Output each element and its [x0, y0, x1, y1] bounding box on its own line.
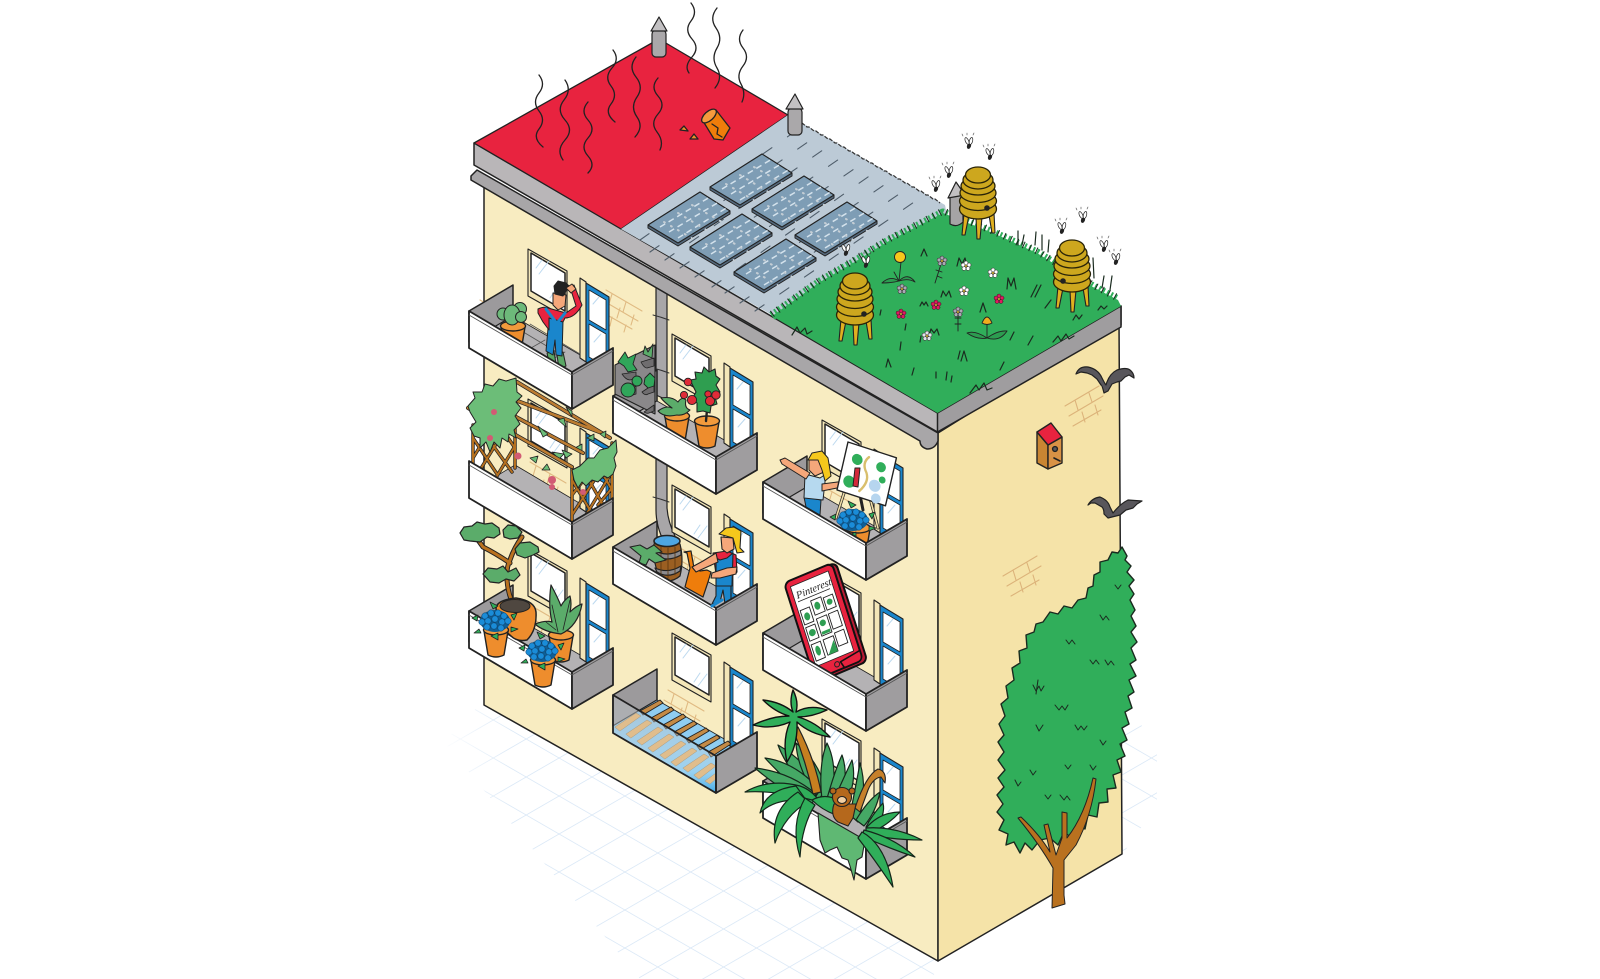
roof zigzag edge [788, 115, 940, 203]
left trellis [473, 400, 515, 476]
balcony column 2 row 1: living wall and tomato [613, 334, 757, 494]
bat lower [1088, 497, 1142, 518]
gravel dashes [640, 128, 920, 311]
beam leaves [538, 407, 606, 441]
rain barrel [653, 536, 682, 581]
leafy plant [630, 545, 666, 565]
woman [780, 451, 857, 515]
scattered wall leaves [530, 444, 582, 470]
tree [997, 547, 1137, 908]
grass tufts [792, 231, 1112, 393]
bat upper [1076, 367, 1134, 393]
beehive top [960, 167, 996, 239]
balcony column 1 row 3: bonsai and pots [460, 522, 613, 709]
building right wall [938, 320, 1122, 961]
jungle leaves mid [745, 783, 841, 857]
glass front [613, 695, 716, 793]
green roof meadow [772, 213, 1121, 413]
jungle leaves front [858, 803, 922, 887]
wooden slats front [615, 713, 716, 784]
balcony column 3 row 3: jungle planter [745, 690, 922, 887]
paintbrush hand [853, 468, 860, 487]
balcony column 3 row 2: giant phone with Pinterest [763, 561, 907, 731]
chimney by solar panels [786, 94, 803, 135]
chimney by beehive [948, 182, 965, 226]
tomato plant [680, 367, 720, 448]
heat waves [536, 3, 746, 173]
brick textures [474, 290, 1103, 732]
meadow flowers [882, 252, 1007, 339]
bonsai tree [460, 522, 539, 640]
right vine foliage [572, 440, 617, 488]
living wall [615, 344, 655, 414]
watering can [684, 551, 711, 597]
ground grid [440, 700, 1157, 979]
downpipe [653, 285, 675, 542]
balcony column 3 row 1: woman painting [763, 420, 907, 580]
easel legs [836, 490, 878, 528]
floor tiles [520, 324, 580, 360]
Pinterest label: Pinterest [794, 576, 834, 602]
balcony column 2 row 2: rain barrel and gardener [613, 485, 757, 645]
hive entrances [861, 205, 1066, 317]
chimney left [651, 17, 667, 57]
building left wall [484, 180, 938, 961]
grey gravel roof section [621, 115, 950, 315]
gardener [692, 527, 744, 604]
grass blades along roof edge [772, 211, 1118, 316]
red roof section [474, 39, 788, 229]
small potted plant [658, 398, 690, 443]
flower pot [830, 501, 876, 555]
solar panels [648, 154, 877, 293]
birdhouse [1037, 423, 1062, 469]
balcony column 2 row 3: wood deck over water storage [613, 633, 757, 793]
canvas painting [837, 442, 896, 507]
aloe plant [535, 585, 582, 662]
beehive left [836, 273, 874, 345]
grape clusters [487, 409, 586, 495]
roof slab edge [474, 143, 1121, 432]
broken flower pot [680, 107, 730, 140]
beehive right [1054, 240, 1090, 312]
man [538, 281, 582, 369]
roof slab right side [938, 306, 1121, 432]
phone [784, 561, 867, 683]
wooden slats back [640, 700, 731, 757]
bees [839, 133, 1121, 269]
gutter [471, 170, 938, 449]
palm tree [753, 690, 830, 794]
blue flowers pot right [519, 632, 565, 687]
blue flowers pot left [472, 602, 518, 657]
balcony column 1 row 1: man with heat [469, 249, 613, 409]
cactus plant [497, 302, 526, 353]
hanging moss [818, 813, 865, 880]
water floor [613, 700, 757, 793]
jungle leaves back [755, 743, 880, 826]
monkey [830, 769, 885, 826]
right trellis [572, 443, 612, 522]
pergola beams [468, 382, 610, 467]
left vine foliage [468, 378, 522, 452]
balcony column 1 row 2: pergola with climbers [468, 378, 617, 559]
